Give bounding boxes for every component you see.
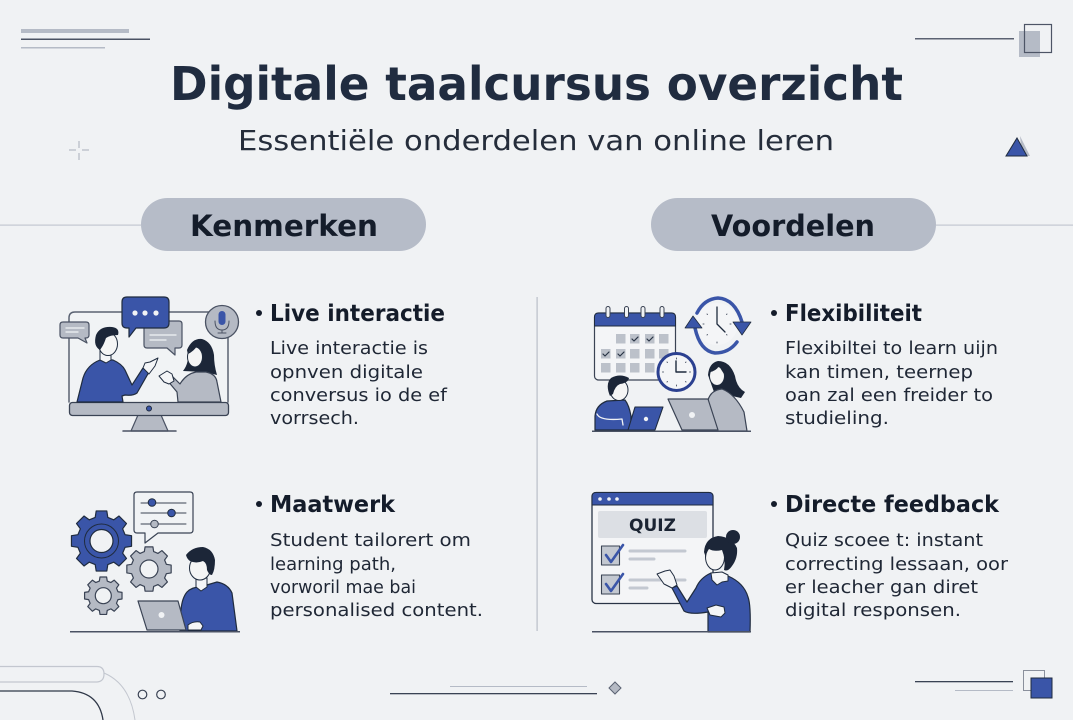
bubbles [60, 322, 89, 343]
bullet and text: Directe feedback [771, 490, 1009, 621]
woman [708, 361, 745, 398]
icon: calendar and clock [592, 298, 751, 432]
bullet and text: Directe feedback: digital responsen. [785, 600, 961, 621]
bullet and text: Directe feedback: er leacher gan diret [785, 577, 978, 598]
bullet and text: Maatwerk: personalised content. [270, 600, 483, 621]
bullet and text: Maatwerk: Student tailorert om [270, 530, 471, 551]
bullet and text: Live interactie: vorrsech. [270, 408, 359, 429]
teacher [672, 573, 750, 632]
heading: Kenmerken: Kenmerken [190, 209, 378, 243]
bullet and text: Live interactie: conversus io de ef [270, 385, 448, 406]
subtitle: Essentiële onderdelen van online leren [238, 125, 834, 157]
bullet and text: Maatwerk: Maatwerk [270, 490, 396, 518]
bullet and text: Maatwerk: learning path, [270, 554, 396, 575]
top-right decoration [915, 24, 1052, 57]
icon: gears and settings [70, 492, 240, 632]
crosshair decoration [69, 141, 89, 160]
bullet and text: Live interactie [256, 299, 448, 429]
bullet and text: Live interactie: opnven digitale [270, 362, 423, 383]
calendar [594, 313, 676, 380]
settings bubble [134, 492, 193, 543]
bullet and text: Maatwerk: vorworil mae bai [270, 577, 416, 598]
bullet and text: Directe feedback: correcting lessaan, oor [785, 554, 1009, 575]
bullet and text: Flexibiliteit: studieling. [785, 408, 889, 429]
clock small [658, 354, 695, 390]
bottom-center decoration [390, 682, 621, 694]
center divider [536, 297, 538, 631]
icon: quiz window and teacher [592, 492, 751, 632]
grey gear 1 [127, 547, 171, 591]
title: Digitale taalcursus overzicht [170, 57, 903, 111]
bullet and text: Live interactie: Live interactie [270, 299, 445, 327]
boy [595, 400, 631, 430]
cycle clock [696, 303, 738, 345]
grey gear 2 [85, 577, 122, 614]
man [77, 360, 149, 402]
blue gear [71, 511, 132, 571]
bullet and text: Flexibiliteit: Flexibiltei to learn uijn [785, 338, 998, 359]
bullet and text: Live interactie: Live interactie is [270, 338, 428, 359]
heading: Voordelen: Voordelen [711, 209, 875, 243]
heading: Kenmerken [141, 198, 426, 251]
heading: Voordelen [651, 198, 936, 251]
mic [206, 306, 238, 338]
bullet and text: Flexibiliteit: kan timen, teernep [785, 362, 973, 383]
top-left decorative lines [21, 29, 150, 48]
icon: video call on monitor [60, 297, 238, 431]
bullet and text: Flexibiliteit: Flexibiliteit [785, 299, 922, 327]
bullet and text: Flexibiliteit [771, 299, 998, 429]
bottom-left decoration [0, 666, 165, 720]
bottom-right decoration [915, 670, 1052, 698]
woman [183, 339, 217, 375]
bullet and text: Directe feedback: Directe feedback [785, 490, 1000, 518]
icon: quiz window and teacher: QUIZ [629, 516, 676, 536]
section rule lines [0, 224, 1073, 226]
triangle decoration [1006, 136, 1030, 156]
bullet and text: Flexibiliteit: oan zal een freider to [785, 385, 993, 406]
bullet and text: Directe feedback: Quiz scoee t: instant [785, 530, 983, 551]
person [180, 582, 237, 631]
bullet and text: Maatwerk [256, 490, 483, 621]
